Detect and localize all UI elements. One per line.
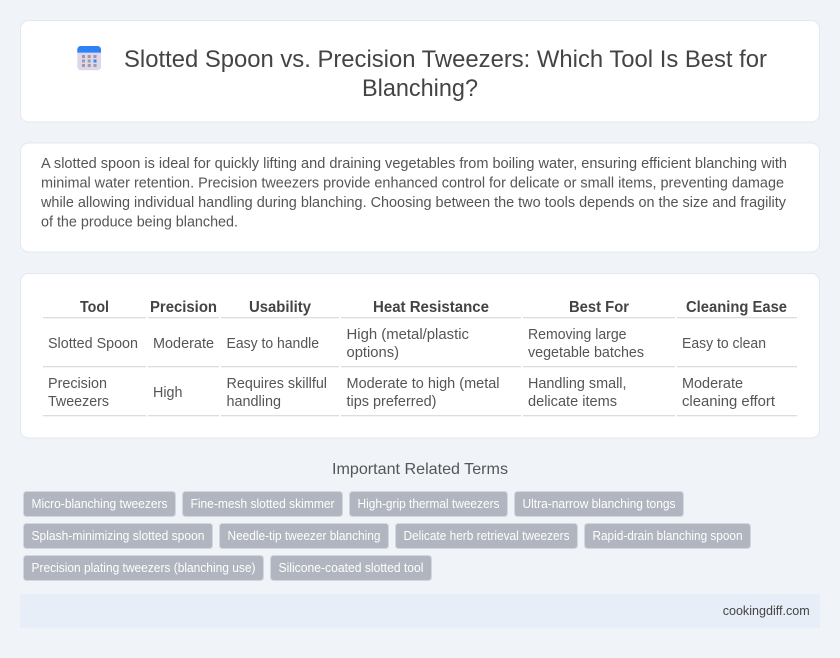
table row: precision tweezers: High — [153, 385, 182, 401]
table row: precision tweezers: cleaning effort — [682, 394, 775, 410]
table row: precision tweezers: Requires skillful — [226, 376, 327, 392]
tag: Micro-blanching tweezers — [32, 496, 168, 511]
table header: Best For — [569, 299, 629, 316]
tag: High-grip thermal tweezers — [358, 496, 500, 511]
tag: Splash-minimizing slotted spoon — [32, 528, 204, 543]
heading: important related terms: Important Related Terms — [332, 461, 508, 478]
table header: Cleaning Ease — [686, 299, 787, 316]
tag — [24, 492, 176, 516]
panel: comparison table — [20, 274, 820, 438]
tag — [182, 492, 342, 516]
title: Blanching? — [362, 75, 478, 102]
tag: Fine-mesh slotted skimmer — [190, 496, 335, 511]
tag: Ultra-narrow blanching tongs — [522, 496, 676, 511]
tag — [584, 524, 750, 548]
intro paragraph: of the produce being blanched. — [41, 214, 238, 230]
tag — [514, 492, 684, 516]
tag — [24, 556, 264, 580]
tag — [220, 524, 388, 548]
table row: slotted spoon: Moderate — [153, 336, 214, 352]
table header: Precision — [150, 299, 217, 316]
table row: slotted spoon: Slotted Spoon — [48, 336, 138, 352]
header panel — [20, 20, 820, 122]
table row: slotted spoon: Easy to clean — [682, 336, 766, 352]
tag: Precision plating tweezers (blanching use) — [32, 560, 256, 575]
table row: precision tweezers — [48, 376, 775, 410]
table header: Usability — [249, 299, 311, 316]
tag: Silicone-coated slotted tool — [278, 560, 424, 575]
table row: precision tweezers: Moderate to high (metal — [346, 376, 500, 392]
table row: precision tweezers: tips preferred) — [346, 394, 436, 410]
table row: slotted spoon: vegetable batches — [528, 345, 644, 361]
table row: precision tweezers: Precision — [48, 376, 107, 392]
panel: intro text — [20, 143, 820, 252]
footer bar — [20, 594, 820, 628]
footer source: cookingdiff.com — [723, 603, 810, 618]
table row: precision tweezers: delicate items — [528, 394, 617, 410]
intro paragraph — [40, 156, 787, 230]
table row: slotted spoon: options) — [346, 345, 399, 361]
table header: Heat Resistance — [373, 299, 489, 316]
tag: Needle-tip tweezer blanching — [228, 528, 380, 543]
tag — [24, 524, 212, 548]
tag — [350, 492, 508, 516]
tag — [270, 556, 432, 580]
table row: precision tweezers: Handling small, — [528, 376, 626, 392]
title — [124, 46, 767, 102]
table header — [80, 299, 787, 316]
table row: slotted spoon — [48, 327, 766, 361]
table row: precision tweezers: Tweezers — [48, 394, 109, 410]
intro paragraph: while allowing individual handling during blanching. Choosing between the two tools depends on the size and fragility — [40, 195, 787, 211]
tag — [396, 524, 578, 548]
table row: slotted spoon: Removing large — [528, 327, 626, 343]
table row: precision tweezers: handling — [226, 394, 281, 410]
related term tags — [24, 492, 750, 580]
table row: precision tweezers: Moderate — [682, 376, 743, 392]
table row: slotted spoon: High (metal/plastic — [346, 327, 469, 343]
intro paragraph: minimal water retention. Precision tweezers provide enhanced control for delicate or small items, preventing damage — [41, 176, 784, 192]
table row: slotted spoon: Easy to handle — [226, 336, 319, 352]
title: Slotted Spoon vs. Precision Tweezers: Which Tool Is Best for — [124, 46, 767, 73]
intro paragraph: A slotted spoon is ideal for quickly lifting and draining vegetables from boiling water, ensuring efficient blanching with — [41, 156, 787, 172]
tag: Delicate herb retrieval tweezers — [404, 528, 570, 543]
icon: calendar — [77, 46, 101, 70]
tag: Rapid-drain blanching spoon — [592, 528, 742, 543]
table header: Tool — [80, 299, 109, 316]
